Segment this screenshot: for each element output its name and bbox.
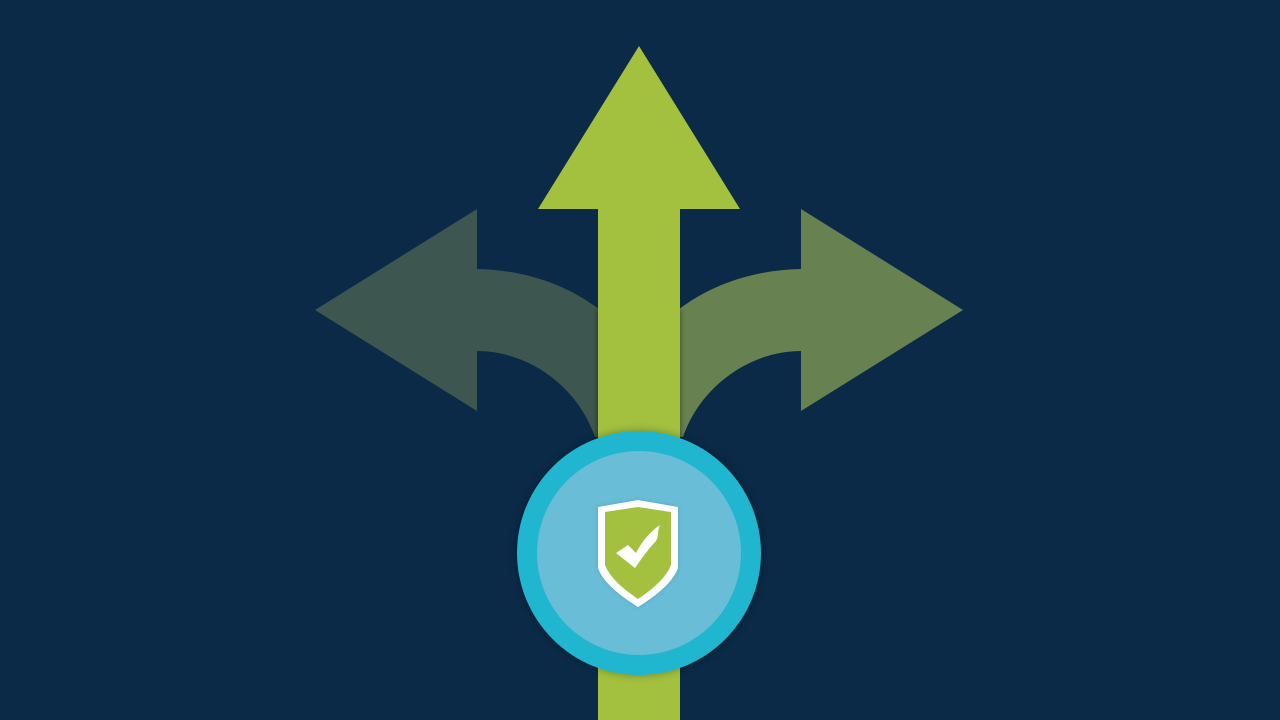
central arrow shadow	[596, 310, 682, 445]
left arrow (dimmed)	[315, 209, 600, 437]
inner circle	[537, 451, 741, 655]
shield fill	[605, 507, 671, 599]
circle badge	[516, 430, 762, 676]
circle shadow	[516, 430, 762, 676]
shield shadow	[598, 500, 678, 607]
central green arrow	[538, 46, 740, 720]
right arrow (dimmed)	[678, 209, 963, 437]
shield outline	[598, 500, 678, 607]
icon: shield with checkmark	[598, 500, 678, 607]
outer circle	[517, 431, 761, 675]
checkmark	[616, 525, 660, 568]
